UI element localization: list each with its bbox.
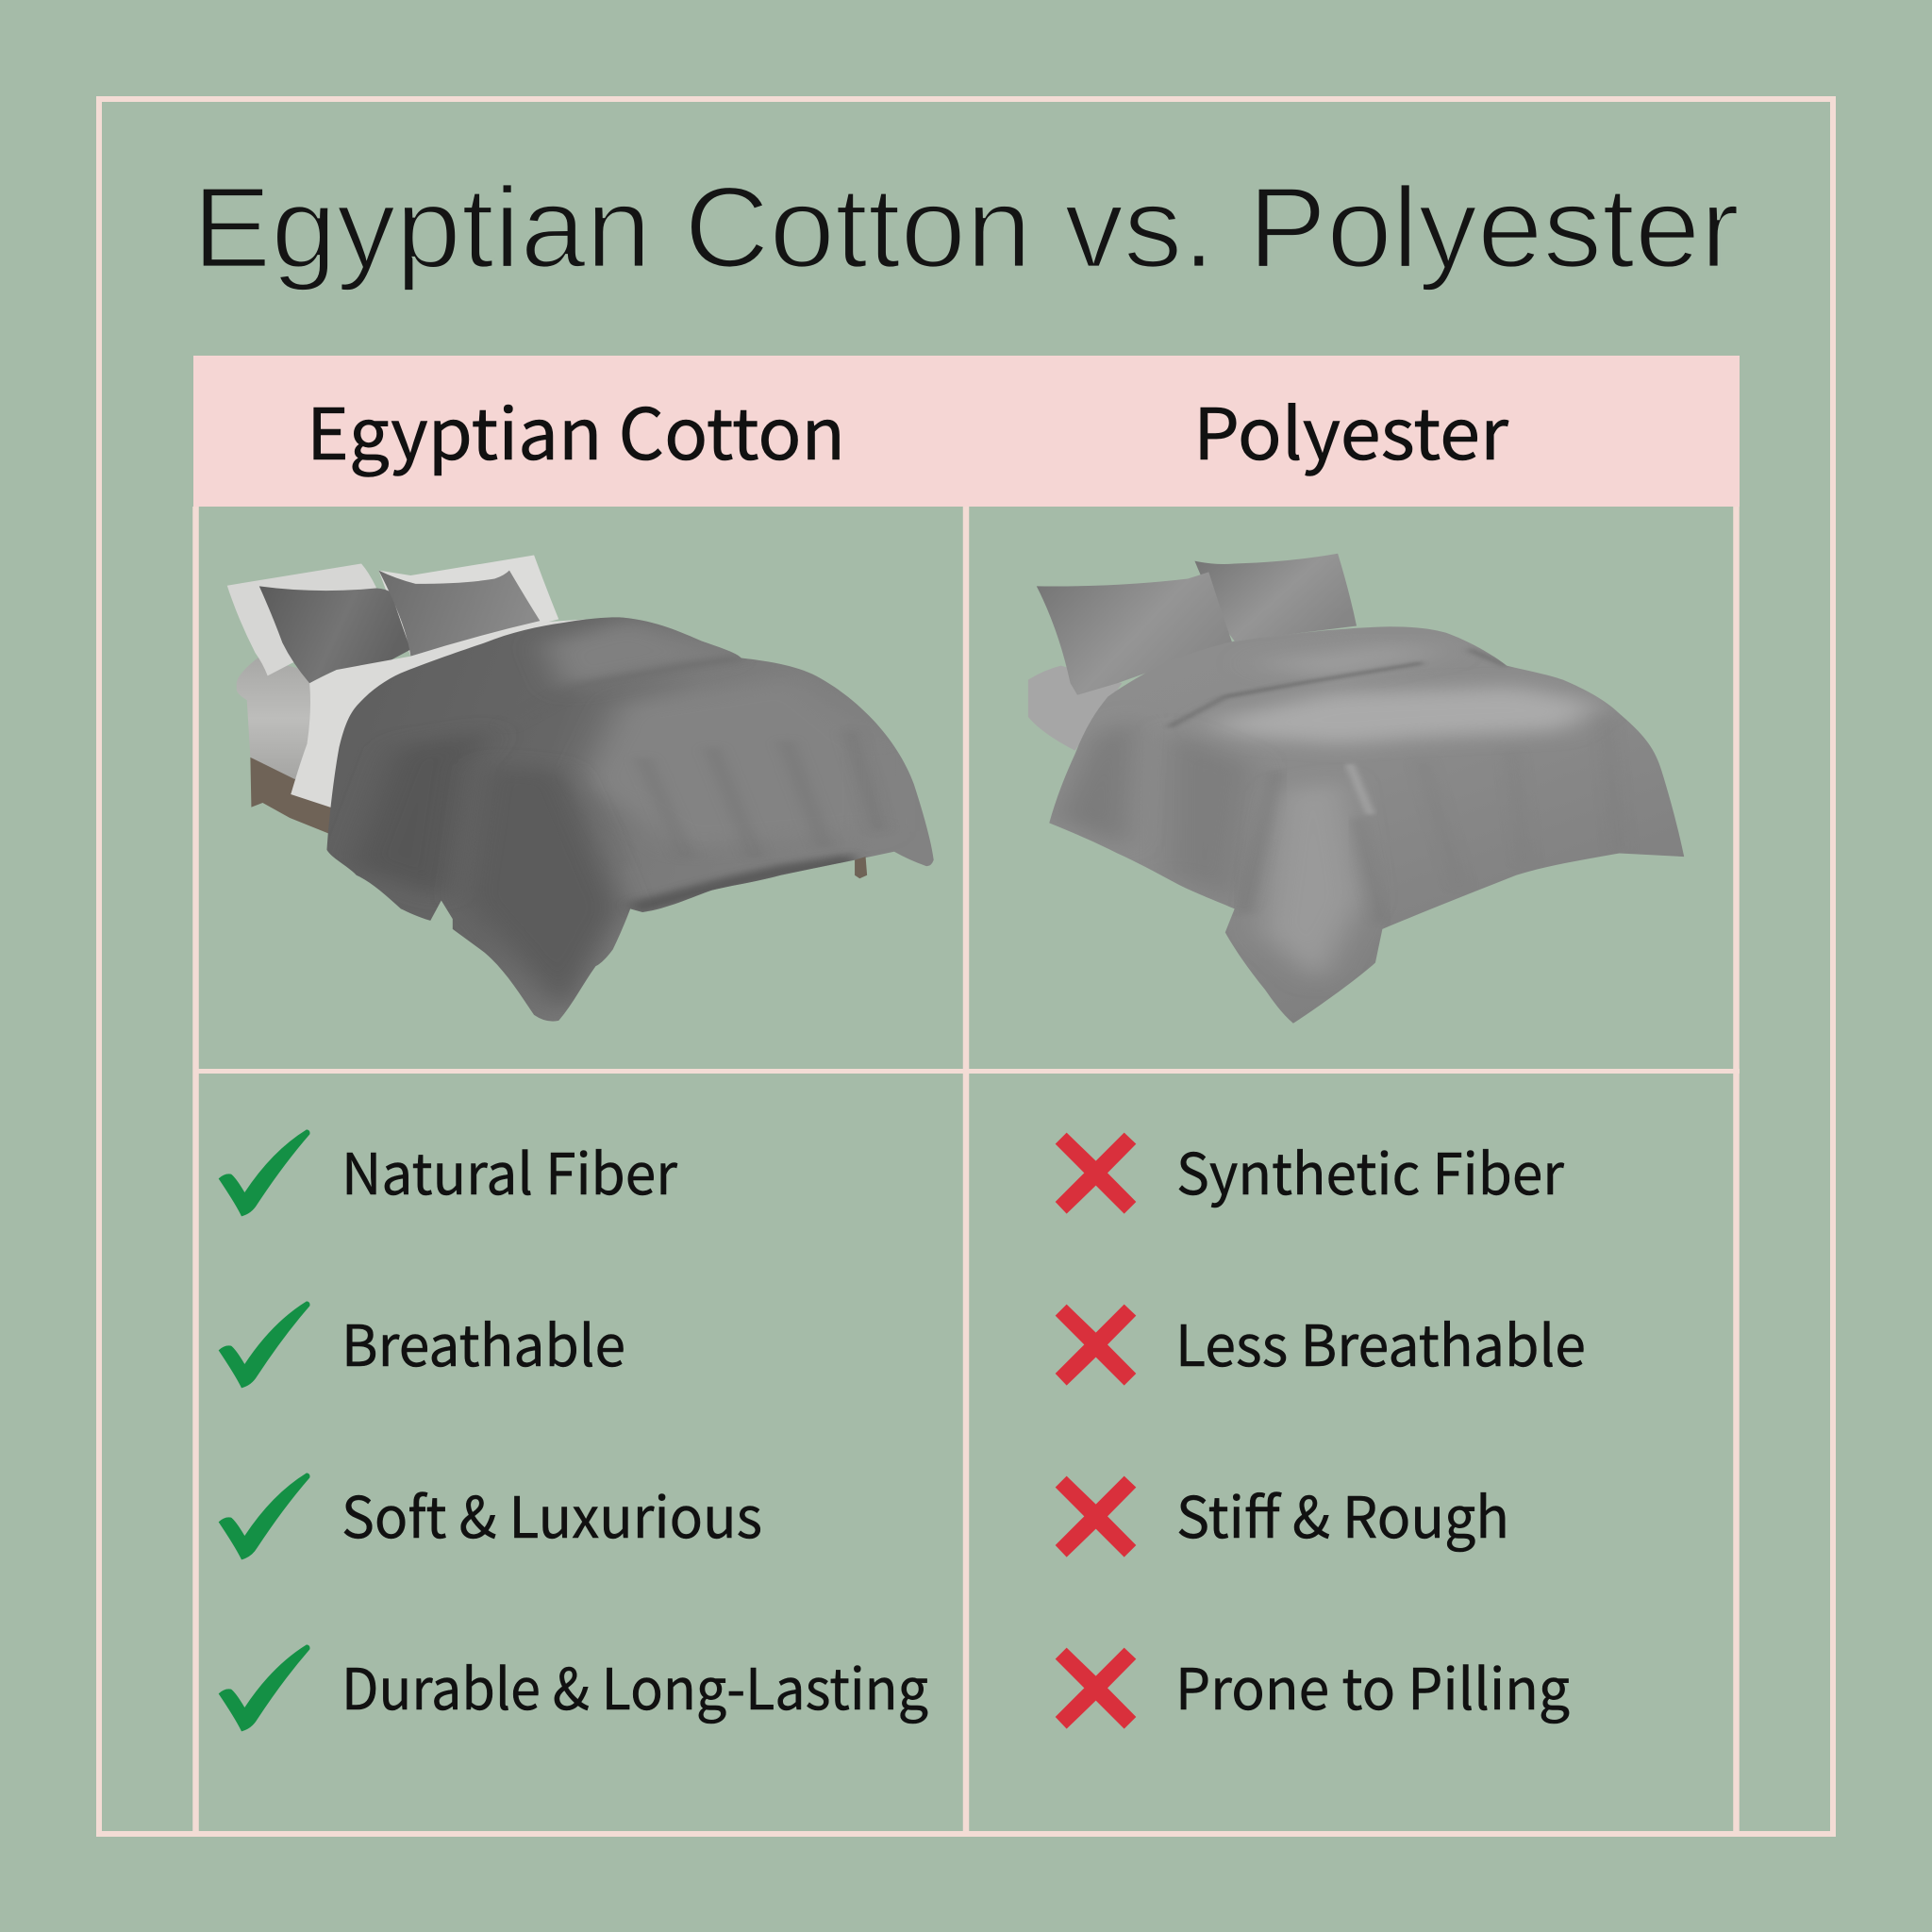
back pillow: [1194, 554, 1357, 641]
fitted sheet: [237, 658, 337, 779]
white top sheet: [291, 619, 589, 808]
column heading: Egyptian Cotton: Egyptian Cotton: [307, 377, 845, 480]
item: Breathable: Breathable: [341, 1301, 625, 1383]
column heading: Polyester: Polyester: [1193, 377, 1509, 480]
item: Natural Fiber: Natural Fiber: [341, 1129, 678, 1211]
item: Synthetic Fiber: Synthetic Fiber: [1176, 1129, 1565, 1211]
bed leg: [855, 857, 867, 878]
white back pillow right: [378, 556, 558, 657]
check icon 4: [219, 1644, 310, 1731]
title: Egyptian Cotton vs. Polyester: [192, 163, 1740, 291]
table header band: [193, 356, 1740, 507]
white back pillow left: [227, 563, 386, 675]
comparison table: [193, 356, 1740, 1834]
fitted sheet: [1028, 666, 1122, 751]
check icon 3: [219, 1473, 310, 1559]
duvet: [1049, 626, 1684, 1024]
list: Egyptian cotton benefits: [219, 1129, 928, 1731]
table grid lines: [196, 507, 1736, 1834]
bed frame: [250, 758, 337, 835]
front pillow: [1037, 572, 1232, 695]
item: Soft & Luxurious: Soft & Luxurious: [341, 1473, 762, 1555]
image: polyester bed: [1028, 554, 1684, 1024]
gray pillow right: [378, 571, 540, 657]
cross icon 4: [1056, 1648, 1136, 1729]
list: polyester drawbacks: [1056, 1129, 1586, 1729]
item: Stiff & Rough: Stiff & Rough: [1176, 1473, 1509, 1555]
check icon 2: [219, 1301, 310, 1388]
cross icon 1: [1056, 1133, 1136, 1214]
image: Egyptian cotton bed: [227, 556, 934, 1022]
check icon 1: [219, 1129, 310, 1216]
cross icon 3: [1056, 1476, 1136, 1557]
item: Prone to Pilling: Prone to Pilling: [1175, 1644, 1570, 1726]
gray pillow left: [259, 586, 410, 683]
table row divider: [193, 1069, 1740, 1074]
item: Durable & Long-Lasting: Durable & Long-Lasting: [341, 1644, 928, 1726]
cross icon 2: [1056, 1305, 1136, 1386]
duvet: [326, 617, 934, 1022]
item: Less Breathable: Less Breathable: [1175, 1301, 1586, 1383]
